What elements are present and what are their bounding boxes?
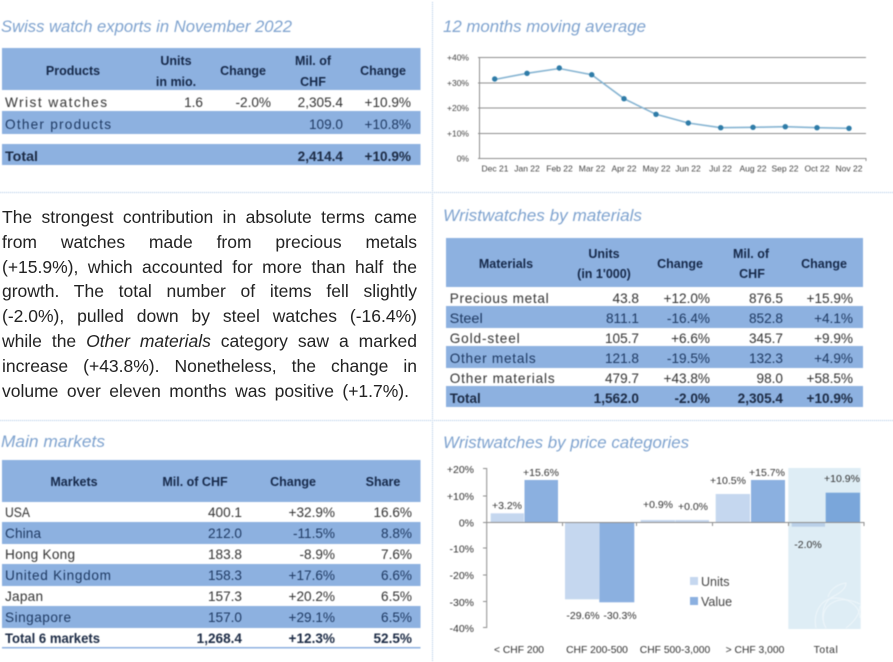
table: materials: (in 1'000)	[577, 267, 631, 281]
table: materials: -2.0%	[674, 391, 710, 406]
table: materials: 98.0	[757, 371, 783, 386]
table: products: Other products	[5, 117, 111, 132]
text block: commentary paragraph: volume over eleven months was positive (+1.7%).	[2, 381, 409, 401]
text block: commentary paragraph: from watches made from precious metals	[2, 232, 417, 252]
heading: Wristwatches by materials: Wristwatches by materials	[443, 207, 642, 225]
table: materials: +4.9%	[814, 351, 853, 366]
table: materials: Other metals	[450, 351, 536, 366]
table: main markets: 6.6%	[381, 568, 412, 583]
bar chart: price categories: +0.9%	[643, 499, 673, 511]
table: materials: 811.1	[606, 311, 639, 326]
line chart: 12 months moving average: +40%	[447, 52, 469, 62]
table: materials: Total	[450, 391, 481, 406]
text block: commentary paragraph: increase (+43.8%). Nonetheless, the change in	[2, 356, 417, 376]
heading: Wristwatches by price categories: Wristwatches by price categories	[443, 434, 689, 452]
line chart: 12 months moving average: +20%	[447, 103, 469, 113]
table: materials	[446, 238, 863, 407]
bar chart: price categories: +15.6%	[523, 467, 559, 479]
table: main markets: 1,268.4	[197, 631, 242, 646]
icon: watermark	[815, 583, 860, 628]
table: materials: 43.8	[613, 291, 639, 306]
table: main markets: Markets	[50, 475, 98, 489]
heading: Main markets: Main markets	[1, 433, 105, 451]
table: products: 109.0	[309, 117, 343, 132]
line chart: 12 months moving average: Nov 22	[836, 164, 863, 174]
line chart: 12 months moving average	[447, 52, 866, 174]
table: materials: Precious metal	[450, 291, 549, 306]
table: materials: 876.5	[749, 291, 783, 306]
table: main markets: +12.3%	[289, 631, 335, 646]
table: products: Products	[46, 64, 100, 78]
table: main markets: Change	[270, 475, 316, 489]
table: main markets: 157.3	[208, 589, 242, 604]
bar chart: price categories: < CHF 200	[494, 645, 544, 656]
table: materials: 132.3	[749, 351, 783, 366]
table: materials: 345.7	[749, 331, 783, 346]
bar chart: price categories: -30%	[449, 597, 474, 609]
table: products: Change	[360, 64, 406, 78]
table: main markets: -11.5%	[293, 526, 335, 541]
line chart: 12 months moving average: Oct 22	[804, 164, 830, 174]
table: main markets: Share	[366, 475, 400, 489]
line chart: 12 months moving average: Apr 22	[611, 164, 637, 174]
table: products: Change	[220, 64, 266, 78]
table: products: +10.9%	[365, 95, 411, 110]
table: main markets: +17.6%	[289, 568, 335, 583]
bar chart: price categories: -20%	[449, 570, 474, 582]
line chart: 12 months moving average: Mar 22	[579, 164, 605, 174]
text block: commentary paragraph	[2, 207, 417, 401]
bar chart: price categories: 0%	[459, 518, 474, 530]
table: main markets: China	[5, 526, 41, 541]
bar chart: price categories: Total	[814, 645, 838, 656]
table: materials: +43.8%	[664, 371, 710, 386]
table: materials: Gold-steel	[450, 331, 520, 346]
bar chart: price categories: CHF 200-500	[566, 645, 628, 656]
line chart: 12 months moving average: Jul 22	[709, 164, 732, 174]
bar chart: price categories: +10.9%	[824, 473, 860, 485]
line chart: 12 months moving average: May 22	[643, 164, 671, 174]
table: main markets: 6.5%	[381, 589, 412, 604]
table: main markets: Total 6 markets	[5, 631, 100, 646]
table: materials: -16.4%	[667, 311, 710, 326]
table: materials: Mil. of	[733, 247, 770, 261]
line chart: 12 months moving average: Feb 22	[546, 164, 573, 174]
table: materials: 479.7	[605, 371, 639, 386]
table: products: +10.9%	[365, 149, 411, 164]
table: materials: +4.1%	[814, 311, 853, 326]
bar chart: price categories: CHF 500-3,000	[640, 645, 710, 656]
table: materials: 121.8	[605, 351, 639, 366]
text block: commentary paragraph: (-2.0%), pulled down by steel watches (-16.4%)	[2, 306, 417, 326]
table: main markets: 6.5%	[381, 610, 412, 625]
bar chart: price categories: +15.7%	[749, 467, 785, 479]
table: materials: Steel	[450, 311, 483, 326]
table: materials: +12.0%	[664, 291, 710, 306]
table: products: Total	[5, 149, 38, 164]
bar chart: price categories: -29.6%	[566, 610, 600, 622]
table: products: -2.0%	[235, 95, 271, 110]
table: materials: +10.9%	[807, 391, 853, 406]
bar chart: price categories: +10.5%	[710, 475, 746, 487]
table: products: Wrist watches	[5, 95, 107, 110]
table: main markets: +29.1%	[289, 610, 335, 625]
table: materials: Units	[588, 247, 620, 261]
text block: commentary paragraph: growth. The total number of items fell slightly	[2, 281, 417, 301]
table: main markets: Singapore	[5, 610, 71, 625]
table: materials: 1,562.0	[594, 391, 639, 406]
bar chart: price categories: +3.2%	[492, 500, 522, 512]
text block: commentary paragraph: The strongest contribution in absolute terms came	[2, 207, 417, 227]
line chart: 12 months moving average: Aug 22	[740, 164, 767, 174]
table: main markets: +32.9%	[289, 505, 335, 520]
table: products: Mil. of	[295, 54, 332, 68]
table: main markets: +20.2%	[289, 589, 335, 604]
table: products: in mio.	[156, 75, 196, 89]
table: main markets: 183.8	[208, 547, 242, 562]
table: materials: 105.7	[605, 331, 639, 346]
table: materials: 852.8	[749, 311, 783, 326]
line chart: 12 months moving average: Dec 21	[482, 164, 509, 174]
bar chart: price categories: -10%	[449, 544, 474, 556]
bar chart: price categories: -30.3%	[603, 610, 637, 622]
bar chart: price categories: +0.0%	[678, 501, 708, 513]
table: main markets: Mil. of CHF	[162, 475, 228, 489]
table: materials: 2,305.4	[738, 391, 783, 406]
line chart: 12 months moving average: Jan 22	[514, 164, 540, 174]
table: materials: CHF	[739, 267, 765, 281]
table: materials: +58.5%	[807, 371, 853, 386]
legend: Units	[701, 575, 729, 589]
table: products: CHF	[300, 75, 326, 89]
table: products: 2,414.4	[298, 149, 343, 164]
table: products: +10.8%	[365, 117, 411, 132]
line chart: 12 months moving average: +10%	[447, 128, 469, 138]
table: main markets: 157.0	[208, 610, 242, 625]
bar chart: price categories	[447, 464, 864, 656]
table: materials: +15.9%	[807, 291, 853, 306]
heading: Swiss watch exports: Swiss watch exports in November 2022	[1, 18, 292, 36]
bar chart: price categories: +20%	[447, 464, 474, 476]
table: main markets: 8.8%	[381, 526, 412, 541]
table: materials: Change	[657, 257, 703, 271]
bar chart: price categories: > CHF 3,000	[726, 645, 785, 656]
table: main markets	[2, 460, 420, 648]
table: materials: Other materials	[450, 371, 555, 386]
table: main markets: 7.6%	[381, 547, 412, 562]
table: main markets: -8.9%	[299, 547, 335, 562]
text block: commentary paragraph: (+15.9%), which accounted for more than half the	[2, 257, 417, 277]
table: main markets: Hong Kong	[5, 547, 75, 562]
line chart: 12 months moving average: Jun 22	[675, 164, 701, 174]
line chart: 12 months moving average: Sep 22	[772, 164, 799, 174]
table: materials: +6.6%	[671, 331, 710, 346]
table: materials: -19.5%	[667, 351, 710, 366]
bar chart: price categories: -2.0%	[794, 539, 822, 551]
table: products: 1.6	[184, 95, 203, 110]
line chart: 12 months moving average: +30%	[447, 78, 469, 88]
text block: commentary paragraph: while the Other materials category saw a marked	[2, 331, 417, 351]
table: main markets: United Kingdom	[5, 568, 111, 583]
table: main markets: 212.0	[208, 526, 242, 541]
bar chart: price categories: -40%	[449, 623, 474, 635]
table: main markets: 52.5%	[373, 631, 412, 646]
table: products: 2,305.4	[298, 95, 343, 110]
table: main markets: 400.1	[208, 505, 242, 520]
table: materials: Materials	[479, 257, 533, 271]
table: materials: +9.9%	[814, 331, 853, 346]
table: products: Units	[160, 54, 192, 68]
heading: 12 months moving average: 12 months moving average	[443, 18, 646, 36]
table: main markets: 158.3	[208, 568, 242, 583]
bar chart: price categories: +10%	[447, 491, 474, 503]
line chart: 12 months moving average: 0%	[457, 154, 469, 164]
legend	[690, 575, 732, 609]
table: materials: Change	[801, 257, 847, 271]
table: main markets: Japan	[5, 589, 43, 604]
table: main markets: USA	[5, 505, 31, 520]
legend: Value	[701, 595, 732, 609]
table: products	[2, 48, 420, 165]
table: main markets: 16.6%	[373, 505, 412, 520]
